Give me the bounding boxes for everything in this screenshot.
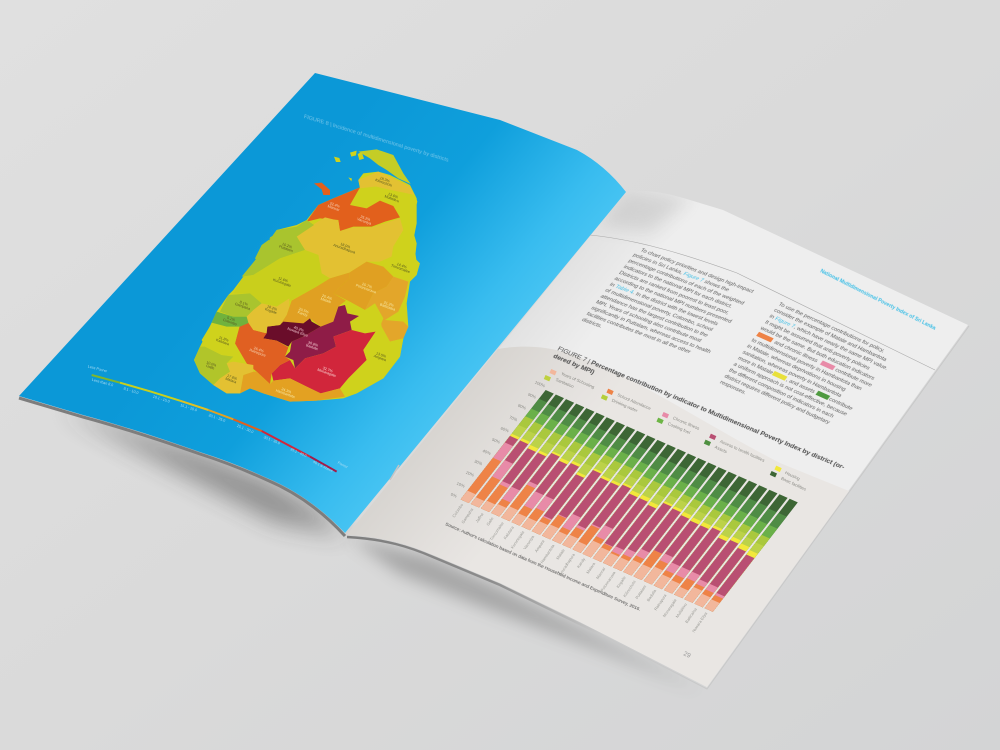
series: years of schooling — [461, 485, 724, 612]
body text: left column: districts. — [580, 317, 604, 330]
body text: left column: MPI. Years of schooling also contribute most — [594, 300, 703, 344]
y axis labels: 30% — [474, 459, 483, 466]
y axis labels: 10% — [456, 481, 466, 489]
body text: left column: significantly in Puttalam, whereas access to health — [589, 306, 712, 355]
legend: sanitation — [544, 375, 575, 389]
legend: drinking water — [601, 394, 639, 413]
body text: right column: responses. — [718, 380, 748, 396]
map labels: 14.4% — [396, 262, 407, 269]
body text: right column: to multidimensional poverty in Hambantota than — [750, 338, 863, 392]
y axis labels: 50% — [491, 437, 501, 445]
body text: left column: percentage contributions of each of the weighted — [627, 259, 745, 306]
rule under running head — [590, 235, 935, 370]
y axis labels: 80% — [517, 403, 527, 411]
map labels: Kandy — [297, 310, 308, 318]
body text: left column: To chart policy priorities and design high-impact — [639, 248, 755, 295]
body text: left column: of multidimensional poverty, Colombo, school — [603, 288, 714, 333]
x axis district labels: Kilinochchi — [622, 579, 637, 598]
left page edge thickness — [19, 398, 345, 536]
chart legend — [544, 369, 807, 492]
map labels: 18.3% — [379, 176, 390, 183]
brochure mockup scene — [18, 73, 970, 690]
series: access to health facilities — [461, 434, 764, 612]
body text: left column: Districts are ranked from poorest to least poor, — [617, 270, 731, 316]
body text: right column: the different composition of indicators in each — [727, 368, 835, 419]
district: Puttalam — [242, 220, 314, 277]
map labels: Puttalam — [278, 245, 293, 253]
x axis district labels: Monaragala — [662, 597, 678, 618]
right page: text and chart page — [347, 191, 968, 687]
inline key: chronic illness — [820, 361, 836, 370]
map labels: 20.7% — [361, 282, 373, 289]
y axis labels: 100% — [534, 380, 546, 388]
district: Kalutara — [202, 323, 240, 357]
map labels: 22.4% — [329, 201, 340, 209]
body text: left column: in Table 4. In the district with the lowest levels — [608, 282, 719, 327]
body text: right column — [717, 301, 899, 438]
map labels: Ratnapura — [249, 348, 267, 358]
map labels: Hambantota — [275, 389, 296, 399]
district: Colombo — [212, 312, 249, 327]
map labels: 10.0% — [206, 360, 217, 368]
x axis district labels: Nuwara Eliya — [691, 610, 709, 633]
x axis district labels: Mullaitivu — [674, 602, 688, 619]
body text: right column: district requires different policy and budgetary — [723, 374, 831, 426]
district: Mannar and Vavuniya — [307, 187, 400, 231]
panel: chart background — [347, 347, 849, 687]
map labels: 18.0% — [340, 242, 351, 249]
district: Polonnaruwa — [333, 262, 393, 310]
map labels: 10.2% — [281, 242, 293, 249]
series: housing — [461, 432, 765, 612]
district: Mullaitivu — [350, 187, 417, 228]
map labels: Badulla — [305, 343, 319, 351]
legend labels — [87, 364, 349, 473]
stacked bars — [461, 390, 798, 612]
Mannar island — [314, 183, 330, 195]
map labels: Matara — [225, 377, 238, 385]
series: drinking water — [461, 416, 777, 612]
x axis district labels: Gampaha — [460, 506, 475, 524]
legend labels: Less Poorer — [87, 364, 108, 374]
map labels: 11.6% — [278, 276, 288, 283]
y axis labels — [450, 380, 546, 499]
y axis labels: 20% — [465, 470, 475, 478]
y axis labels: 70% — [509, 415, 518, 422]
x axis district labels: Trincomalee — [489, 520, 505, 542]
map labels: Mullaitivu — [384, 194, 400, 203]
x axis district labels — [451, 502, 709, 633]
running head: National Multidimensional Poverty Index of Sri Lanka — [819, 268, 937, 332]
northern islands — [334, 151, 364, 181]
legend: chronic illness — [662, 412, 700, 431]
body text: left column: facilities contributes the most in all the other — [585, 312, 692, 355]
map labels: Mannar — [327, 204, 341, 212]
x axis district labels: Kegalle — [615, 574, 627, 589]
body text: right column: a uniform approach is not cost-effective, because — [732, 362, 848, 417]
map labels: Matale — [320, 297, 332, 304]
map legend scale — [87, 364, 349, 473]
body text: right column: contribute more — [833, 367, 873, 388]
map labels: 20.5% — [298, 307, 309, 314]
x axis district labels: Jaffna — [474, 511, 485, 524]
body text: right column: , and assets — [785, 378, 816, 395]
x axis district labels: Badulla — [646, 588, 658, 602]
right page edge thickness — [347, 537, 600, 634]
district: Nuwara Eliya — [263, 318, 321, 347]
x axis district labels: Mannar — [595, 566, 607, 580]
map labels: 25.2% — [360, 215, 371, 222]
legend colour ramp — [92, 375, 337, 472]
district: Batticaloa — [365, 277, 408, 342]
legend: chronic illness: Chronic illness — [672, 415, 700, 431]
legend labels: Less than 8.0 — [91, 378, 114, 387]
legend: assets — [704, 440, 728, 454]
figure title: FIGURE 7 | Percentage contribution by indicator to Multidimensional Poverty Index by district (or- — [556, 346, 846, 471]
gutter shade at spine top — [606, 192, 682, 233]
map labels: Polonnaruwa — [355, 283, 377, 295]
x axis district labels: Kandy — [576, 557, 586, 569]
x axis district labels: Hambantota — [539, 543, 556, 564]
series: sanitation — [461, 425, 771, 612]
legend: cooking fuel: Cooking fuel — [667, 421, 691, 435]
x axis district labels: Matale — [555, 547, 566, 560]
legend labels: 40.1 & Above — [312, 460, 334, 473]
x axis district labels: Vavuniya — [522, 534, 536, 551]
legend: years of schooling: Years of Schooling — [560, 371, 596, 390]
inline key: assets — [815, 391, 830, 400]
x axis district labels: Kurunegala — [510, 529, 526, 549]
map labels: 32.7% — [322, 366, 333, 373]
x axis district labels: Polonnaruwa — [599, 570, 617, 593]
map labels: Colombo — [222, 318, 237, 327]
x axis district labels: Ampara — [534, 538, 546, 553]
legend: sanitation: Sanitation — [555, 377, 575, 389]
map labels: 13.5% — [375, 351, 387, 359]
map labels: Kalutara — [215, 338, 231, 347]
district: Matale and Kandy — [280, 273, 349, 327]
map labels: 13.6% — [387, 192, 399, 199]
map labels: 24.3% — [281, 387, 292, 394]
spine staple — [390, 465, 399, 480]
legend: housing — [774, 466, 801, 482]
legend labels: 30.1 - 35.0 — [263, 435, 281, 445]
legend: cooking fuel — [656, 418, 691, 435]
y axis labels: 90% — [527, 392, 537, 400]
y axis labels: 40% — [482, 448, 492, 456]
body text: right column: would be the same. But both education indicators — [758, 325, 876, 382]
legend: school attendance: School Attendance — [617, 392, 652, 411]
figure title: dered by MPI) — [552, 353, 596, 376]
map labels: 20.4% — [321, 294, 333, 301]
shadow under right page — [348, 536, 700, 690]
district: Ampara south — [340, 332, 403, 397]
series: school attendance — [461, 458, 745, 612]
legend labels: 10.1 - 15.0 — [152, 394, 170, 404]
legend labels: 15.1 - 20.0 — [180, 403, 198, 412]
map of Sri Lanka by district — [194, 149, 420, 402]
inline key: housing — [772, 371, 788, 381]
legend: drinking water: Drinking water — [611, 398, 639, 413]
x axis district labels: Galle — [485, 515, 495, 527]
body text: left column: policies in Sri Lanka, Figure 7 shows the — [631, 253, 730, 293]
series: assets — [461, 399, 791, 612]
map labels: Anuradhapura — [333, 243, 357, 255]
map labels: 8.1% — [239, 300, 248, 307]
body text: right column: in Matale, whereas deprivations in housing — [745, 344, 847, 393]
district: Kurunegala — [233, 250, 330, 307]
district: Kilinochchi — [358, 172, 415, 197]
legend labels: Poorer — [337, 461, 349, 470]
map labels: 5.1% — [226, 316, 236, 322]
x axis district labels: Batticaloa — [684, 606, 698, 624]
island silhouette underlay — [194, 172, 419, 402]
map labels: 11.8% — [218, 335, 229, 343]
shadow under left page — [60, 408, 345, 535]
body text: right column: To use the percentage contributions for policy, — [777, 302, 886, 354]
district: Ratnapura — [235, 323, 290, 384]
series: cooking fuel — [461, 409, 783, 612]
body text: left column: attendance has the largest contribution to the — [599, 294, 709, 339]
legend labels: 35.1 - 40.0 — [290, 447, 307, 458]
legend: basic facilities — [770, 471, 807, 492]
legend labels: 20.1 - 25.0 — [208, 413, 226, 423]
body text: right column: and chronic illness — [772, 340, 819, 364]
map labels: Kurunegala — [272, 278, 292, 288]
map labels: Batticaloa — [379, 303, 397, 312]
y axis labels: 60% — [500, 426, 510, 433]
map labels: Kilinochchi — [375, 178, 393, 188]
series: chronic illness — [461, 442, 757, 612]
right page lower edge highlight — [600, 326, 969, 689]
inline key: school attendance — [756, 332, 774, 342]
body text: right column: It might be assumed that anti-poverty policies — [763, 320, 871, 372]
figure title on left page: FIGURE 8 | Incidence of multidimensional poverty by districts — [304, 114, 449, 164]
district: Badulla — [285, 305, 359, 368]
x axis district labels: Kalutara — [502, 524, 515, 540]
map labels: 40.2% — [293, 325, 304, 333]
district: Monaragala — [272, 330, 376, 393]
legend: access to health facilities — [709, 434, 765, 463]
district: Hambantota — [240, 372, 345, 402]
page number: 29 — [682, 650, 692, 660]
map labels: 18.2% — [266, 304, 278, 312]
district: Trincomalee — [380, 227, 420, 280]
map labels: 17.6% — [226, 374, 238, 381]
map labels: Ampara — [373, 354, 387, 363]
y axis labels: 0% — [450, 492, 458, 499]
body text: left column: indicators to the national MPI for each district. — [622, 264, 734, 310]
legend: years of schooling — [549, 369, 596, 390]
district: Galle — [194, 347, 233, 385]
series: basic facilities — [461, 390, 798, 612]
x axis district labels: Anuradhapura — [558, 552, 576, 576]
body text: right column: sanitation, whereas poverty in Hambantota — [741, 350, 843, 399]
legend labels: 8.1 - 10.0 — [123, 386, 139, 395]
map labels: Nuwara Eliya — [287, 327, 309, 338]
map labels: Trincomalee — [390, 264, 411, 274]
map labels: 21.2% — [383, 300, 394, 308]
x axis district labels: Colombo — [451, 502, 465, 518]
legend: basic facilities: Basic facilities — [780, 476, 807, 492]
district: Kegalle — [247, 298, 289, 333]
district: Gampaha — [220, 293, 262, 317]
body text: left column: according to the national MPI numbers presented — [613, 276, 733, 325]
district: Jaffna — [358, 149, 411, 184]
district: Matara — [213, 362, 253, 393]
legend: assets: Assets — [714, 444, 728, 454]
legend labels: 25.1 - 30.0 — [236, 424, 254, 434]
x axis district labels: Matara — [585, 561, 597, 575]
legend: school attendance — [606, 389, 652, 411]
Kalpitiya peninsula — [255, 229, 283, 262]
map labels — [205, 175, 412, 399]
x axis district labels: Ratnapura — [653, 592, 668, 611]
legend: access to health facilities: Access to health facilities — [719, 439, 765, 463]
map labels: Kegalle — [264, 307, 277, 315]
chart: percentage contribution by indicator — [450, 369, 807, 633]
map labels: Galle — [206, 364, 215, 371]
map labels: Monaragala — [317, 368, 337, 378]
district: Anuradhapura — [296, 217, 403, 278]
map labels: Vavuniya — [357, 217, 373, 226]
x axis district labels: Puttalam — [634, 584, 648, 600]
map labels: Gampaha — [234, 302, 252, 311]
body text: right column: contribute — [827, 397, 854, 412]
legend: housing: Housing — [784, 470, 801, 482]
body text: right column: in Figure 7, which have nearly the same MPI value. — [768, 314, 889, 372]
body text: right column: consider the example of Matale and Hambantota — [772, 308, 888, 363]
source note: Source: Author's calculation based on data from the Household Income and Expenditure Survey, 2016. — [445, 521, 641, 612]
map labels: 26.4% — [253, 346, 264, 353]
district: lime east — [338, 300, 383, 333]
left page: blue map page — [19, 73, 626, 533]
map labels: 36.8% — [307, 340, 319, 348]
body text: right column: more in Matale — [736, 356, 774, 376]
